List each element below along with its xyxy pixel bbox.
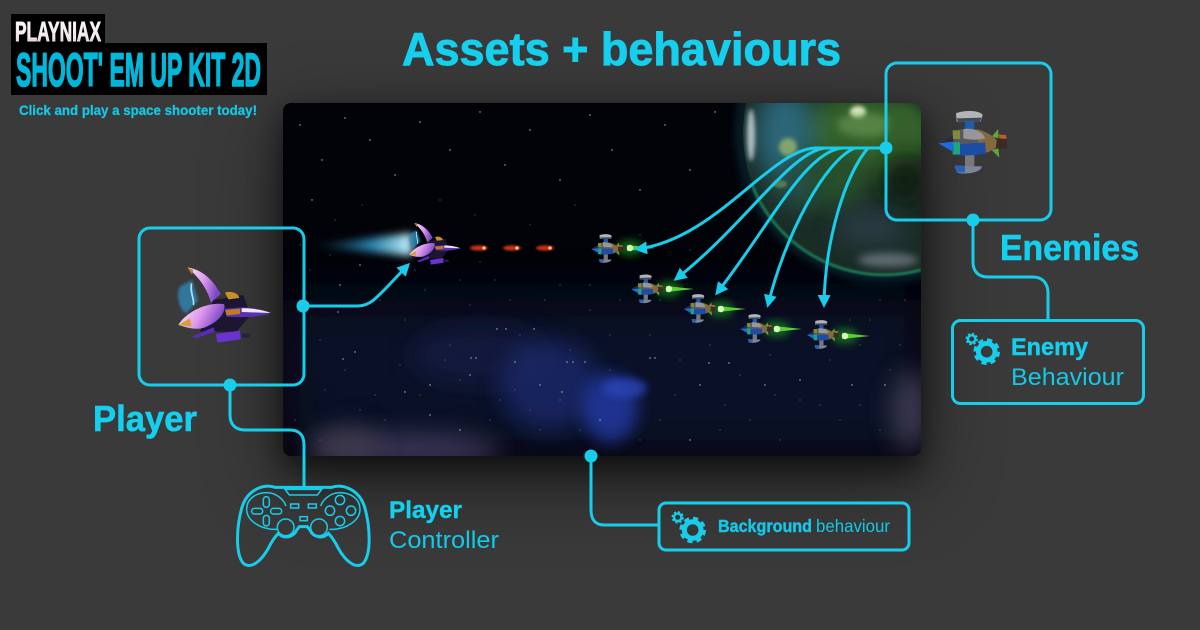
player box [139,228,304,385]
icon: gears [672,512,704,542]
planet [732,103,921,284]
background behaviour label [718,516,890,536]
logo [11,14,267,96]
player label: Player [93,398,197,439]
panel: player [93,228,304,439]
logo: PLAYNIAX: PLAYNIAX [15,16,101,47]
image drop shadow [283,103,921,456]
arrow: player box to ship [296,265,408,312]
background behaviour label: behaviour [816,516,890,536]
lasers [470,245,554,251]
logo: SHOOT' EM UP KIT 2D [16,43,261,96]
icon: gears [966,334,998,363]
thruster plume [308,233,412,256]
tagline: Click and play a space shooter today! [19,103,257,118]
stars [295,112,905,440]
connector: player to controller [224,378,304,490]
background behaviour label: Background [718,516,812,536]
nebula [283,300,930,468]
enemies label: Enemies [1000,227,1139,268]
player controller label: Controller [389,527,499,554]
connector: scene to background behaviour [584,450,659,525]
panel: enemy behaviour: Behaviour [1011,364,1124,391]
player ship [178,267,271,343]
connector: enemies to behaviour [966,214,1048,320]
title: Assets + behaviours [402,23,841,75]
enemy box [886,63,1051,220]
enemy formation [591,234,870,349]
panel: background behaviour [659,503,909,550]
icon: gamepad [237,486,369,565]
player controller label [389,497,499,554]
enemy behaviour label: Enemy [1011,334,1089,361]
player controller label: Player [389,497,462,524]
arrows: enemy box to enemy ships [637,142,892,305]
player ship in scene [409,223,460,265]
panel: enemies [886,63,1139,268]
enemy ship [938,111,1007,173]
panel: space game scene [283,103,921,456]
panel: enemy behaviour [952,320,1144,404]
